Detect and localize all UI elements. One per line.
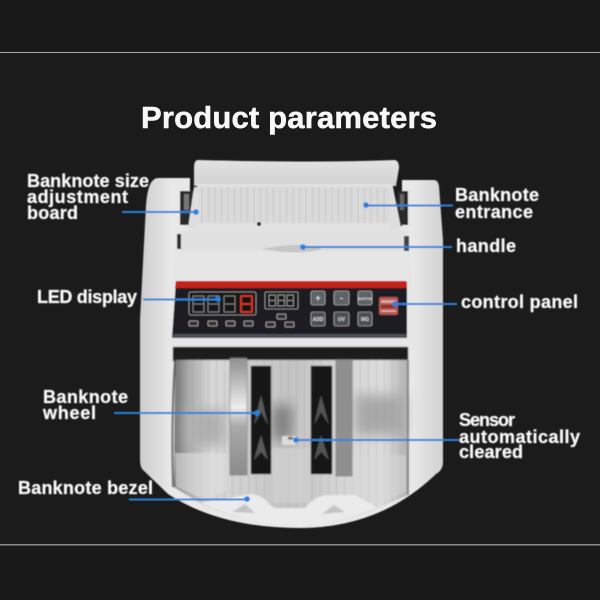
sensor bbox=[282, 436, 296, 445]
red power button bbox=[379, 297, 398, 315]
callout: banknote entrance: Banknote bbox=[455, 185, 539, 205]
machine body bbox=[140, 178, 443, 528]
callout: handle: handle bbox=[456, 236, 516, 256]
callout: banknote wheel: wheel bbox=[42, 403, 96, 423]
callout: handle bbox=[300, 236, 516, 256]
count display bbox=[265, 292, 298, 309]
callout: banknote bezel: Banknote bezel bbox=[18, 478, 153, 498]
keypad: BATCH bbox=[358, 296, 372, 301]
indicator keys bbox=[189, 314, 294, 327]
LED display bbox=[189, 292, 256, 315]
callout: sensor automatically cleared: automatically bbox=[459, 427, 580, 447]
title: Product parameters bbox=[141, 100, 437, 135]
left and right guide slots bbox=[180, 191, 408, 225]
callout: banknote wheel: Banknote bbox=[43, 387, 128, 407]
banknote hopper lid bbox=[188, 160, 402, 231]
banknote counter machine bbox=[18, 160, 580, 528]
callout: banknote size adjustment board bbox=[27, 171, 199, 223]
callout: banknote bezel bbox=[18, 478, 250, 502]
banknote wheels bbox=[251, 366, 332, 474]
callout: banknote size adjustment board: board bbox=[27, 203, 78, 223]
callout: LED display bbox=[37, 287, 221, 307]
banknote bezel bbox=[200, 494, 378, 527]
keypad: ADD bbox=[313, 317, 324, 323]
handle bar bbox=[177, 231, 409, 252]
callout: banknote size adjustment board: adjustment bbox=[27, 187, 128, 207]
front panel cover bbox=[170, 250, 416, 345]
keypad: UV bbox=[338, 317, 346, 323]
callout: banknote entrance: entrance bbox=[455, 202, 533, 222]
keypad: MG bbox=[361, 317, 369, 323]
callout: banknote entrance bbox=[363, 185, 539, 222]
callout: sensor automatically cleared bbox=[293, 410, 580, 462]
callout: LED display: LED display bbox=[37, 287, 137, 307]
callout: sensor automatically cleared: cleared bbox=[459, 442, 523, 462]
control panel bbox=[172, 281, 407, 338]
keypad: - bbox=[340, 293, 343, 303]
banknote outlet bbox=[172, 347, 408, 526]
callout: control panel: control panel bbox=[461, 292, 578, 312]
callout: sensor automatically cleared: Sensor bbox=[459, 410, 515, 430]
callout: banknote size adjustment board: Banknote size bbox=[27, 171, 149, 191]
keypad: + bbox=[315, 293, 321, 303]
keypad bbox=[311, 291, 372, 326]
callout: banknote wheel bbox=[42, 387, 260, 423]
metal guide rails bbox=[230, 358, 352, 476]
callout: control panel bbox=[392, 292, 578, 312]
